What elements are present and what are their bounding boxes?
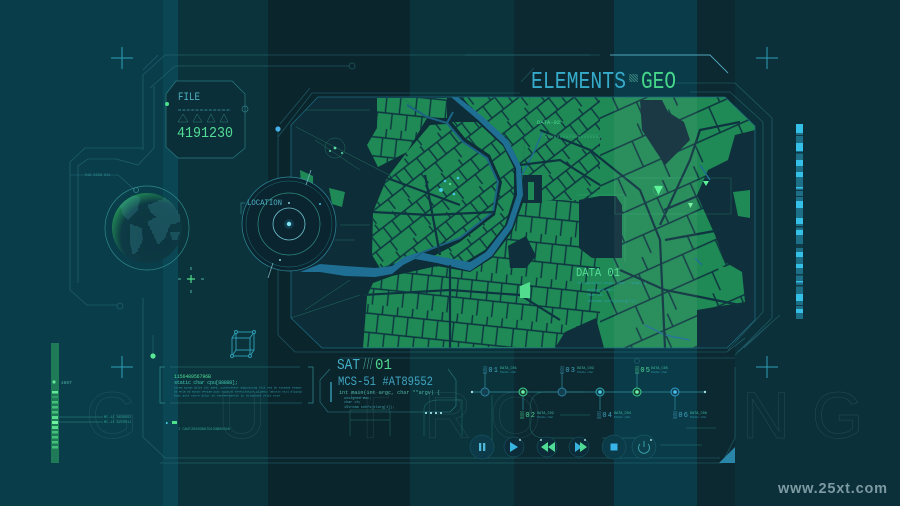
timeline bbox=[471, 366, 707, 420]
title: GEO bbox=[641, 69, 676, 96]
panel: system info: char ch; bbox=[344, 400, 361, 405]
map: lighter band bbox=[614, 97, 697, 348]
ghost background lettering: T bbox=[350, 378, 390, 452]
corner triangle bbox=[719, 447, 735, 463]
crosshair: green bbox=[178, 267, 204, 293]
timeline labels: DATA_C03 bbox=[577, 367, 594, 371]
map: green districts bbox=[300, 97, 755, 348]
panel: code console: 115648956796B bbox=[174, 374, 211, 380]
ghost background lettering: R bbox=[424, 378, 472, 452]
map: dark parks and blocks bbox=[508, 100, 755, 348]
icon: location dot bbox=[275, 126, 281, 132]
panel: system info: SAT bbox=[337, 357, 360, 374]
map: markers bbox=[329, 147, 709, 208]
map: data labels bbox=[537, 119, 646, 304]
crosshair markers bbox=[111, 47, 778, 378]
timeline nodes bbox=[481, 388, 679, 396]
timeline labels: DATA_C06 bbox=[690, 412, 707, 416]
panel: system info bbox=[320, 357, 456, 414]
watermark: www.25xt.com bbox=[777, 481, 887, 497]
radar location: LOCATION bbox=[247, 199, 282, 208]
button: pause bbox=[470, 435, 494, 459]
panel: code console: static char cpu[88888]; bbox=[174, 379, 238, 386]
button: stop bbox=[602, 435, 626, 459]
map: data labels: iStream sohfs(elarg[1]); bbox=[587, 299, 637, 304]
timeline labels: ▒01 bbox=[483, 366, 498, 375]
ghost background lettering: O bbox=[490, 378, 541, 452]
panel: code console: Duis aute irure dolor in reprehenderit in voluptate velit esse bbox=[174, 394, 280, 398]
timeline labels: Static char bbox=[614, 416, 631, 419]
map: street grid bbox=[363, 97, 755, 348]
map: major roads bbox=[363, 122, 740, 348]
timeline labels: Static char bbox=[651, 371, 668, 374]
map: bright parcel bbox=[520, 282, 530, 298]
panel: code console: I CAUT202038979133B02040 bbox=[178, 428, 231, 432]
panel: code console: Ut enim ad minim veniam quis nostrud exercitation ullamco laboris nisi aliquip bbox=[174, 390, 302, 394]
icon: wireframe cube bbox=[230, 330, 256, 358]
panel: system info: int main(int argc, char **argv) { bbox=[339, 389, 440, 396]
panel: system info: /// bbox=[363, 357, 373, 374]
timeline labels: ▒03 bbox=[560, 366, 575, 375]
timeline labels: ▒02 bbox=[520, 411, 535, 420]
map: right side green parcels bbox=[528, 182, 750, 298]
map: data labels: DATA-02 bbox=[537, 119, 560, 126]
timeline labels: Static char bbox=[690, 416, 707, 419]
ghost background lettering bbox=[86, 378, 863, 452]
timeline labels: DATA_C05 bbox=[651, 367, 668, 371]
map: data labels: DATA 01 bbox=[576, 266, 620, 280]
timeline labels: ▒06 bbox=[673, 411, 688, 420]
level bar: MC-14 A21051J bbox=[104, 421, 131, 425]
map: data labels: unsigned mac; bbox=[587, 288, 614, 293]
map: thin overlay lines bbox=[291, 110, 731, 318]
button: forward bbox=[569, 437, 589, 457]
frame circuit lines bbox=[70, 55, 780, 463]
radar location bbox=[241, 170, 336, 278]
panel: code console bbox=[160, 367, 313, 432]
dot marker: green bbox=[150, 353, 156, 359]
ghost background lettering: U bbox=[218, 378, 266, 452]
timeline labels bbox=[483, 366, 707, 420]
timeline labels: ▒05 bbox=[635, 366, 650, 375]
timeline labels: DATA_C02 bbox=[537, 412, 554, 416]
panel: code console: Lorem ipsum dolor sit amet, consectetur adipiscing elit sed do eiusmod tempor bbox=[174, 386, 302, 390]
timeline labels: Static char bbox=[577, 371, 594, 374]
map: data labels: int main(int argc, char **argv) { bbox=[577, 281, 646, 286]
title: ELEMENTS bbox=[531, 69, 626, 96]
level bar: MC-11 A8389S1 bbox=[104, 416, 131, 420]
map: data labels: char ch; bbox=[587, 293, 604, 298]
panel: system info: 01 bbox=[375, 357, 392, 374]
panel: system info: iStream sohfs(elarg[1]); bbox=[344, 405, 394, 410]
timeline labels: ▒04 bbox=[597, 411, 612, 420]
timeline labels: Static char bbox=[500, 371, 517, 374]
level bar bbox=[51, 343, 131, 463]
timeline labels: DATA_C04 bbox=[614, 412, 631, 416]
panel: system info: unsigned mac; bbox=[344, 396, 371, 401]
media controls bbox=[470, 435, 656, 459]
ghost background lettering: G bbox=[86, 378, 137, 452]
level bar: 4897 bbox=[61, 380, 72, 386]
panel: system info: MCS-51 #AT89552 bbox=[338, 375, 433, 389]
ghost background lettering: G bbox=[812, 378, 863, 452]
panel: file: FILE bbox=[178, 92, 200, 104]
data strip bbox=[796, 124, 803, 319]
button: power bbox=[632, 435, 656, 459]
globe bbox=[85, 174, 189, 270]
timeline labels: DATA_C01 bbox=[500, 367, 517, 371]
timeline labels: Static char bbox=[537, 416, 554, 419]
panel: file bbox=[165, 81, 248, 158]
map: rivers bbox=[300, 97, 710, 340]
panel: file: 4191230 bbox=[177, 125, 233, 142]
button: rewind bbox=[537, 437, 557, 457]
ghost background lettering: N bbox=[742, 378, 790, 452]
globe: 016 0206 041 bbox=[85, 174, 110, 178]
button: play bbox=[504, 437, 524, 457]
map bbox=[291, 97, 755, 348]
